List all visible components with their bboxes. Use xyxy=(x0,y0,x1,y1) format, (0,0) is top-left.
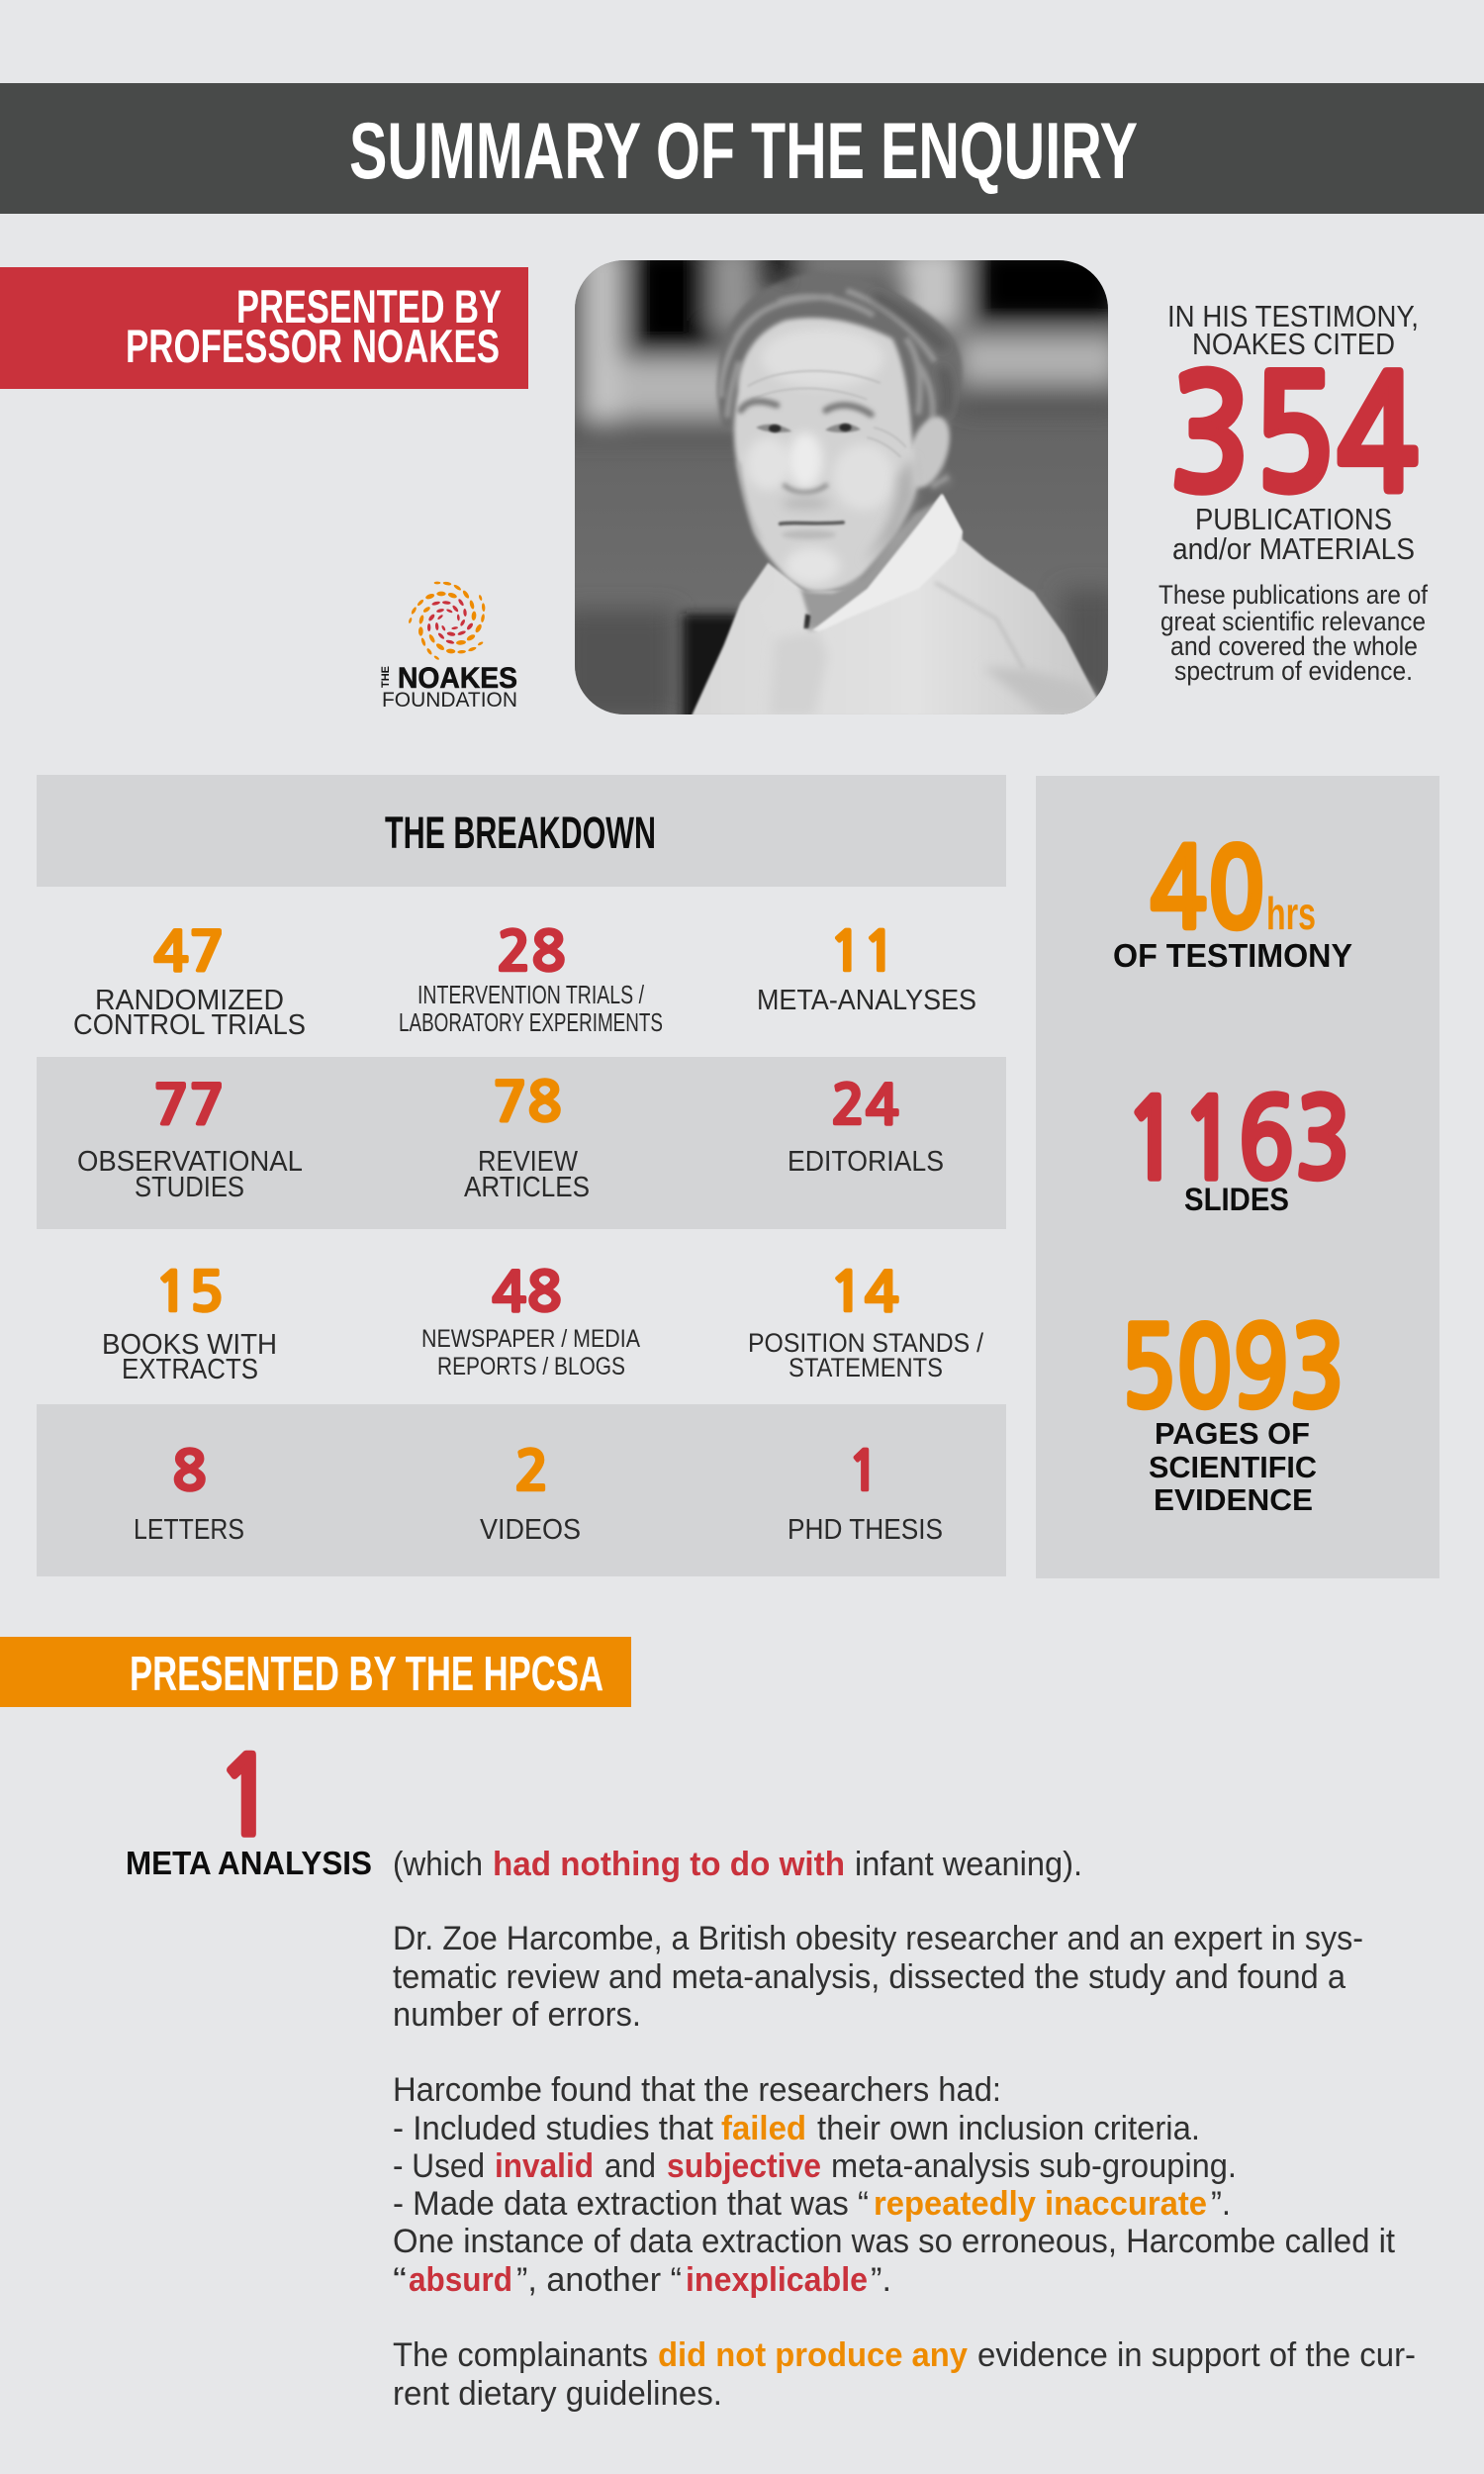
body text: Harcombe critique: rent dietary guidelines. xyxy=(393,2375,722,2413)
body text: Harcombe critique: Harcombe found that the researchers had: xyxy=(393,2071,1001,2109)
stat: 14 position stands: POSITION STANDS / xyxy=(748,1328,983,1358)
stat: 77 observational studies: STUDIES xyxy=(135,1172,244,1203)
logo: The Noakes Foundation xyxy=(380,581,517,712)
body text: Harcombe critique xyxy=(393,1846,1416,2413)
logo wordmark xyxy=(380,662,517,712)
note text: and covered the whole xyxy=(1170,631,1418,661)
stat: 1 meta analysis xyxy=(126,1744,372,1881)
body text: Harcombe critique: meta-analysis sub-grouping. xyxy=(831,2147,1237,2185)
note text: These publications are of xyxy=(1159,580,1428,610)
stat: 47 randomized control trials: RANDOMIZED xyxy=(95,985,284,1016)
stat: 40 hrs of testimony: hrs xyxy=(1266,888,1316,939)
body text: Harcombe critique: ”, another “ xyxy=(516,2261,682,2299)
eyes xyxy=(756,424,861,432)
logo wordmark: NOAKES xyxy=(398,662,517,695)
stat: 78 review articles: 78 xyxy=(493,1077,562,1130)
body text: Harcombe critique: tematic review and meta-analysis, dissected the study and found a xyxy=(393,1958,1345,1996)
panel: the breakdown xyxy=(37,775,1006,1576)
stat: 40 hrs of testimony xyxy=(1113,835,1352,974)
body text: Harcombe critique: inexplicable xyxy=(686,2261,868,2299)
logo wordmark: THE xyxy=(380,666,392,688)
stat: 47 randomized control trials xyxy=(73,926,306,1041)
logo wordmark: FOUNDATION xyxy=(382,689,517,712)
stat: 77 observational studies xyxy=(77,1080,303,1203)
mouth xyxy=(781,523,843,539)
stat: 28 intervention trials: 28 xyxy=(497,926,566,980)
note text: great scientific relevance xyxy=(1160,607,1426,636)
body text: Harcombe critique: “ xyxy=(393,2261,407,2299)
body text: Harcombe critique: infant weaning). xyxy=(855,1846,1082,1883)
stat: 15 books with extracts: BOOKS WITH xyxy=(102,1329,277,1361)
body text: Harcombe critique: number of errors. xyxy=(393,1996,641,2034)
right callout: 354 publications xyxy=(1159,299,1428,686)
stat: 1163 slides: SLIDES xyxy=(1184,1182,1289,1217)
stat: 8 letters: 8 xyxy=(172,1446,207,1499)
stat: 28 intervention trials: LABORATORY EXPERIMENTS xyxy=(399,1007,663,1037)
stat: 2 videos: VIDEOS xyxy=(480,1514,581,1546)
stat: 11 meta-analyses: 11 xyxy=(829,926,896,980)
stat: 2 videos: 2 xyxy=(514,1446,549,1499)
breakdown heading: THE BREAKDOWN xyxy=(385,808,656,858)
stat: 47 randomized control trials: 47 xyxy=(153,926,225,980)
title banner xyxy=(0,83,1484,214)
note text: spectrum of evidence. xyxy=(1174,656,1413,686)
stat: 11 meta-analyses: META-ANALYSES xyxy=(757,985,976,1016)
stat: 78 review articles: REVIEW xyxy=(478,1146,579,1178)
face xyxy=(734,318,918,592)
red banner: presented by Professor Noakes xyxy=(0,267,528,389)
stat: 40 hrs of testimony: 40 xyxy=(1150,835,1265,945)
stat: 14 position stands xyxy=(748,1267,983,1382)
body text: Harcombe critique: - Used xyxy=(393,2147,485,2185)
body text: Harcombe critique: repeatedly inaccurate xyxy=(874,2185,1207,2223)
body text: Harcombe critique: invalid xyxy=(495,2147,594,2185)
stat: 40 hrs of testimony: OF TESTIMONY xyxy=(1113,937,1352,974)
body text: Harcombe critique: - Included studies that xyxy=(393,2110,714,2147)
stat: 1163 slides: 1163 xyxy=(1124,1086,1351,1195)
body text: Harcombe critique: absurd xyxy=(409,2261,512,2299)
stat: 47 randomized control trials: CONTROL TRIALS xyxy=(73,1009,306,1041)
stat: 48 newspaper reports: 48 xyxy=(492,1267,562,1320)
stat: 48 newspaper reports xyxy=(421,1267,640,1380)
shirt xyxy=(692,494,1100,716)
stat: 5093 pages of scientific evidence: EVIDENCE xyxy=(1154,1482,1313,1517)
stat: 24 editorials xyxy=(788,1080,944,1178)
title: SUMMARY OF THE ENQUIRY xyxy=(349,107,1138,196)
stat: 48 newspaper reports: REPORTS / BLOGS xyxy=(437,1353,625,1380)
stat: 28 intervention trials xyxy=(399,926,663,1037)
neck shadow xyxy=(798,502,937,632)
stat: 24 editorials: 24 xyxy=(831,1080,899,1133)
ear xyxy=(911,414,953,491)
orange banner: presented by the HPCSA: PRESENTED BY THE HPCSA xyxy=(130,1648,603,1701)
stat: 1 PhD thesis: PHD THESIS xyxy=(788,1514,943,1546)
stat: 78 review articles: ARTICLES xyxy=(464,1172,590,1203)
stat: 15 books with extracts xyxy=(102,1267,277,1385)
brows xyxy=(741,402,871,415)
stat: 15 books with extracts: EXTRACTS xyxy=(122,1354,258,1385)
body text: Harcombe critique: - Made data extraction that was “ xyxy=(393,2185,869,2223)
stat: 8 letters: LETTERS xyxy=(134,1514,244,1546)
hair xyxy=(714,275,964,429)
stat: 8 letters xyxy=(134,1446,244,1546)
facial light and shade xyxy=(737,329,914,584)
stat: 14 position stands: 14 xyxy=(829,1267,899,1320)
body text: Harcombe critique: their own inclusion criteria. xyxy=(817,2110,1200,2147)
stat: 5093 pages of scientific evidence xyxy=(1120,1314,1345,1517)
body text: Harcombe critique: subjective xyxy=(667,2147,821,2185)
right callout: 354 publications: NOAKES CITED xyxy=(1192,327,1395,361)
stat: 1 meta analysis: 1 xyxy=(216,1744,277,1852)
stat: 77 observational studies: OBSERVATIONAL xyxy=(77,1146,303,1178)
stat: 1 meta analysis: META ANALYSIS xyxy=(126,1845,372,1881)
right callout: 354 publications: and/or MATERIALS xyxy=(1172,531,1415,566)
stat: 14 position stands: STATEMENTS xyxy=(788,1353,943,1382)
stat: 78 review articles xyxy=(464,1077,590,1203)
orange banner: presented by the HPCSA xyxy=(0,1637,631,1707)
nose xyxy=(784,484,828,493)
right callout: 354 publications: IN HIS TESTIMONY, xyxy=(1167,299,1419,333)
stat: 77 observational studies: 77 xyxy=(153,1080,225,1133)
stat: 5093 pages of scientific evidence: 5093 xyxy=(1120,1314,1345,1424)
red banner: presented by Professor Noakes: PRESENTED BY xyxy=(236,280,502,333)
portrait photo: Professor Noakes xyxy=(560,246,1119,726)
body text: Harcombe critique: (which xyxy=(393,1846,483,1883)
note text xyxy=(1159,580,1428,686)
body text: Harcombe critique: evidence in support of the cur- xyxy=(977,2336,1416,2374)
forehead wrinkles xyxy=(748,371,906,457)
red banner: presented by Professor Noakes: PROFESSOR NOAKES xyxy=(126,320,500,372)
stat: 2 videos xyxy=(480,1446,581,1546)
stat: 5093 pages of scientific evidence: SCIENTIFIC xyxy=(1149,1450,1317,1484)
body text: Harcombe critique: ”. xyxy=(871,2261,891,2299)
body text: Harcombe critique: One instance of data extraction was so erroneous, Harcombe called it xyxy=(393,2223,1396,2260)
stat: 1 PhD thesis xyxy=(788,1446,943,1546)
stat: 1 PhD thesis: 1 xyxy=(848,1446,880,1499)
body text: Harcombe critique: had nothing to do with xyxy=(493,1846,845,1883)
body text: Harcombe critique: ”. xyxy=(1211,2185,1231,2223)
body text: Harcombe critique: The complainants xyxy=(393,2336,648,2374)
body text: Harcombe critique: and xyxy=(604,2147,656,2185)
icon: spiral of dots xyxy=(408,581,486,660)
body text: Harcombe critique: did not produce any xyxy=(658,2336,968,2374)
stat: 28 intervention trials: INTERVENTION TRIALS / xyxy=(417,980,645,1009)
hair strands xyxy=(721,291,949,487)
stat: 5093 pages of scientific evidence: PAGES OF xyxy=(1155,1416,1310,1451)
right callout: 354 publications: PUBLICATIONS xyxy=(1195,502,1392,536)
stat: 15 books with extracts: 15 xyxy=(154,1267,224,1320)
breakdown heading xyxy=(37,775,1006,887)
stat: 24 editorials: EDITORIALS xyxy=(788,1146,944,1178)
stat: 48 newspaper reports: NEWSPAPER / MEDIA xyxy=(421,1325,640,1353)
stat: 354: 354 xyxy=(1168,357,1420,515)
stat: 11 meta-analyses xyxy=(757,926,976,1016)
body text: Harcombe critique: failed xyxy=(721,2110,806,2147)
panel: testimony totals xyxy=(1036,776,1439,1578)
body text: Harcombe critique: Dr. Zoe Harcombe, a British obesity researcher and an expert in sys- xyxy=(393,1920,1363,1957)
